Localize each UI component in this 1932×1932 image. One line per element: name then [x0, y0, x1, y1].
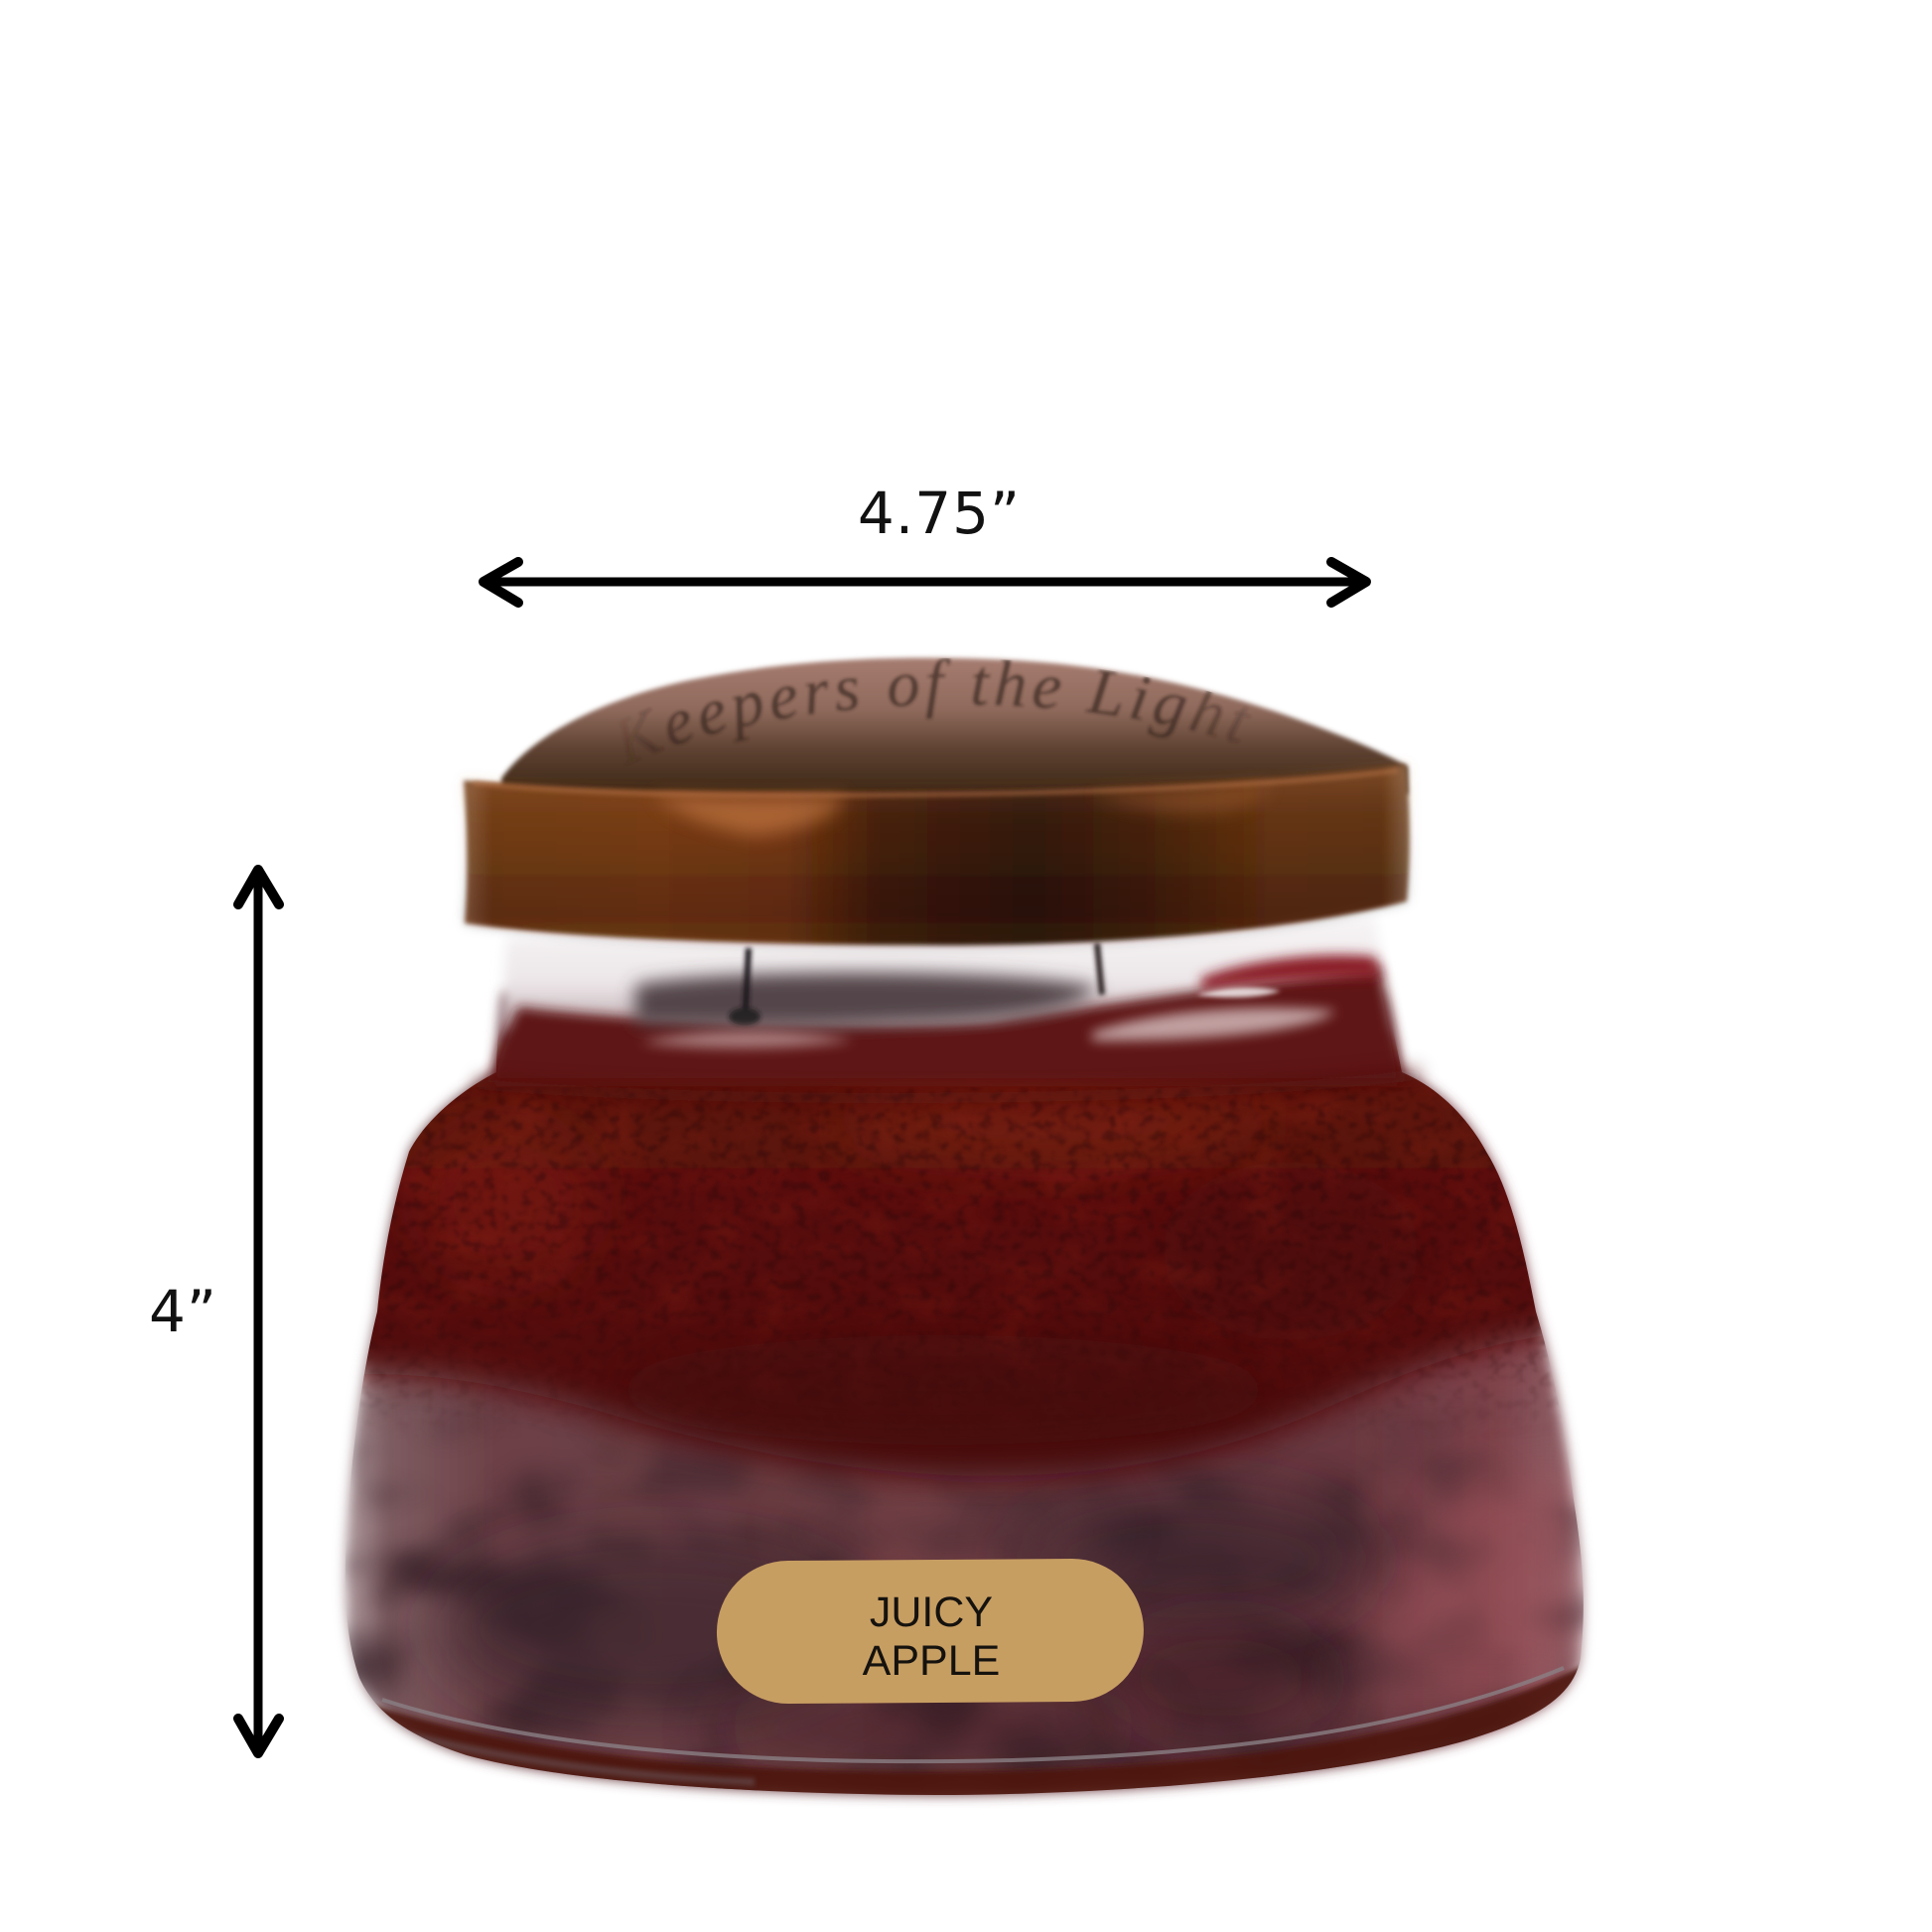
- neck highlights: [640, 1031, 854, 1048]
- height label: 4”: [149, 1278, 217, 1345]
- glass neck: [477, 918, 1420, 1098]
- name label: [716, 1559, 1144, 1705]
- lid band: [464, 764, 1410, 945]
- wax texture speckle: [359, 1087, 1559, 1407]
- jar body: [338, 918, 1598, 1807]
- lower mauve wax mottling: [338, 1370, 1598, 1797]
- lid: [459, 654, 1415, 952]
- wick left: [729, 948, 760, 1026]
- wax layers: [338, 1052, 1598, 1807]
- lid highlight: [655, 796, 844, 836]
- label text: JUICY: [870, 1588, 993, 1636]
- neck red wax: [490, 967, 1402, 1082]
- engraved lid text: Keepers of the Light: [625, 657, 1251, 754]
- width label: 4.75”: [858, 480, 1021, 547]
- lid dome: [497, 654, 1412, 796]
- infographic: candle jar with dimensions: [151, 490, 1591, 1805]
- name label: APPLE: [863, 1637, 1000, 1685]
- wick right: [1097, 943, 1102, 995]
- jar outer glass: [345, 993, 1584, 1795]
- base of jar: [375, 1664, 1579, 1795]
- width arrow: [483, 562, 1366, 603]
- dark wax top: [635, 973, 1097, 1026]
- lid band vertical shading: [464, 764, 1410, 945]
- height arrow: [238, 870, 279, 1753]
- upper red wax: [338, 1052, 1588, 1476]
